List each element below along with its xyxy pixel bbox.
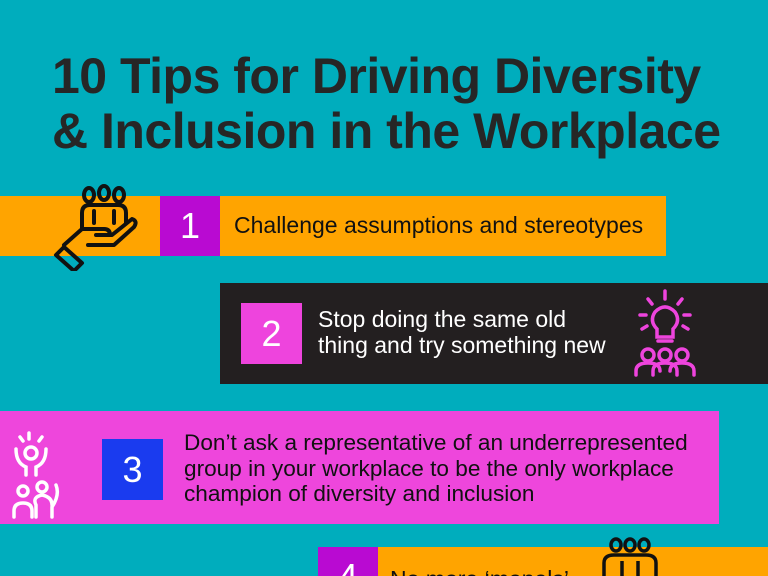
title: 10 Tips for Driving Diversity (52, 48, 701, 104)
icon: group of people (602, 537, 658, 576)
tip 3 text: champion of diversity and inclusion (184, 481, 534, 506)
tip 3 text: group in your workplace to be the only workplace (184, 456, 674, 480)
tip 4 band (318, 547, 768, 576)
tip 2 text: thing and try something new (318, 332, 606, 358)
tip 2 number (241, 303, 302, 364)
tip 1 number: 1 (180, 205, 200, 246)
tip 2 number: 2 (261, 312, 282, 354)
icon: celebrating people (12, 431, 60, 519)
tip 3 number: 3 (122, 448, 143, 490)
tip 1 number (160, 196, 220, 256)
title: & Inclusion in the Workplace (52, 103, 721, 159)
icon: hand holding people (54, 184, 138, 271)
tip 2 text (318, 306, 606, 358)
title (52, 48, 721, 159)
tip 4 number (318, 547, 378, 576)
icon: lightbulb and people (634, 289, 696, 377)
tip 2 text: Stop doing the same old (318, 306, 566, 332)
tip 2 band (220, 283, 768, 384)
tip 3 text: Don’t ask a representative of an underrepresented (184, 430, 688, 455)
tip 3 text (184, 430, 688, 506)
tip 1 text: Challenge assumptions and stereotypes (234, 212, 643, 238)
tip 1 band (0, 196, 666, 256)
tip 3 number (102, 439, 163, 500)
tip 3 band (0, 411, 719, 524)
